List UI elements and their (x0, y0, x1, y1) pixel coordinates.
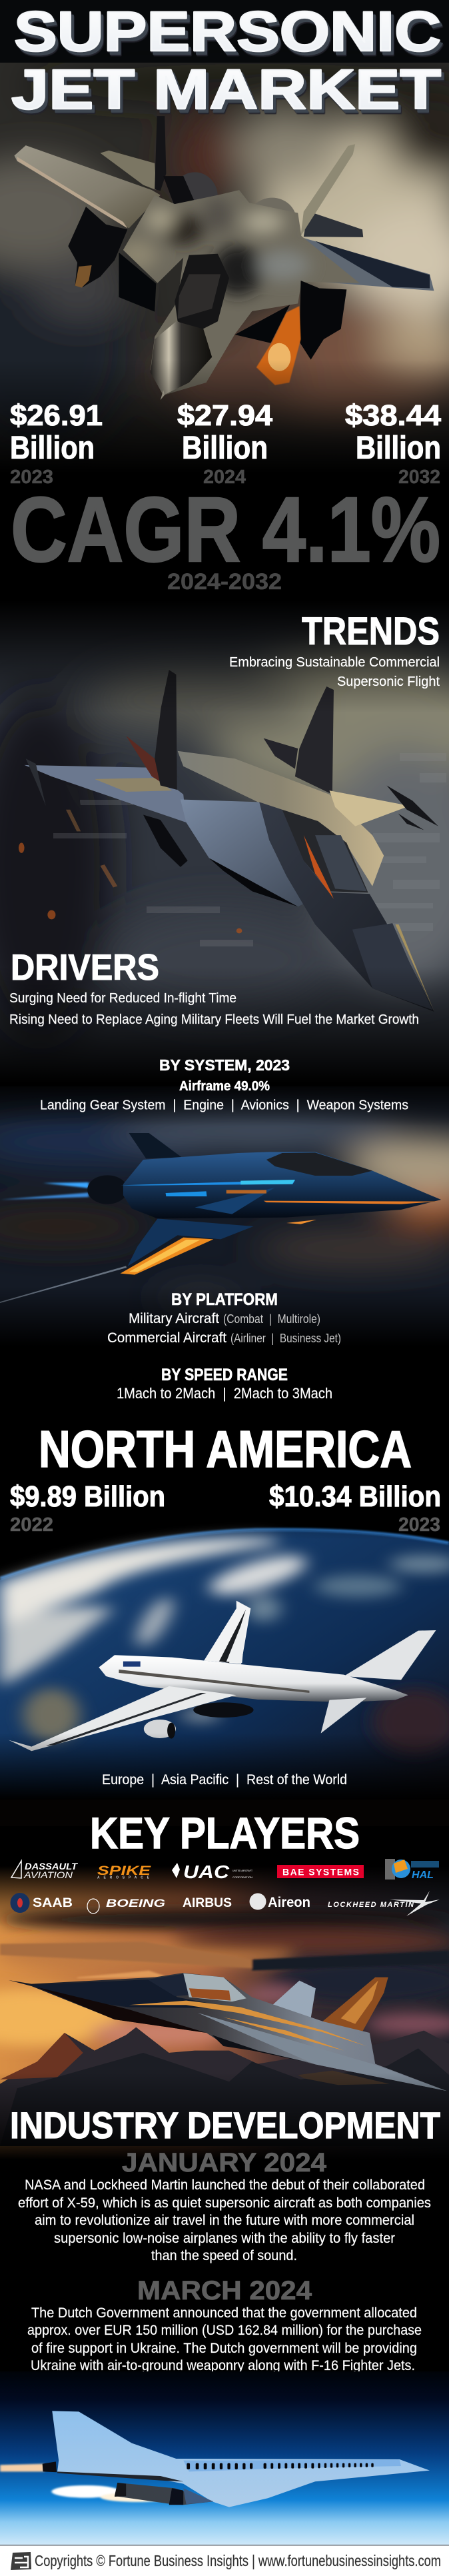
title: SUPERSONIC (14, 0, 441, 63)
commercial aircraft: (Airliner | Business Jet) (230, 1332, 341, 1345)
trends (229, 610, 440, 689)
fighter jet (25, 670, 438, 1012)
logo: Dassault Aviation: AVIATION (23, 1870, 73, 1880)
military aircraft: Military Aircraft (129, 1311, 219, 1326)
description (27, 2305, 422, 2373)
development: January 2024 (18, 2148, 431, 2263)
value 2032: $38.44 (345, 399, 442, 432)
image: jet over mountains at sunset (0, 1866, 449, 2173)
description: approx. over EUR 150 million (USD 162.84 million) for the purchase (27, 2323, 422, 2338)
trends text: Supersonic Flight (337, 674, 440, 689)
logo: Saab (11, 1893, 73, 1913)
logo: Aireon: Aireon (268, 1895, 310, 1910)
hero fade (0, 360, 449, 473)
image: jet over city (0, 615, 449, 1068)
title: JET MARKET (11, 58, 441, 121)
trends text: Embracing Sustainable Commercial (229, 655, 440, 670)
icon: Fortune Business Insights logo (11, 2552, 31, 2570)
value 2023: 2023 (10, 467, 53, 488)
description: supersonic low-noise airplanes with the ability to fly faster (54, 2231, 395, 2246)
fighter jet (15, 116, 434, 400)
logo: Dassault Aviation (11, 1861, 79, 1880)
drivers text: Surging Need for Reduced In-flight Time (9, 990, 236, 1006)
commercial aircraft: Commercial Aircraft (107, 1330, 226, 1346)
logo: UAC: UAC (183, 1862, 230, 1882)
market values (10, 399, 442, 488)
value 2022 (10, 1480, 165, 1536)
value 2022: $9.89 Billion (10, 1480, 165, 1513)
footer (0, 2545, 449, 2576)
commercial aircraft (107, 1330, 341, 1346)
description: The Dutch Government announced that the government allocated (31, 2305, 417, 2321)
description (18, 2177, 431, 2263)
CAGR period: 2024-2032 (167, 569, 282, 595)
drivers text: Rising Need to Replace Aging Military Fleets Will Fuel the Market Growth (9, 1012, 419, 1027)
segment: by platform (107, 1290, 341, 1346)
airframe share: Airframe 49.0% (179, 1079, 270, 1094)
description: aim to revolutionize air travel in the future with more commercial (35, 2213, 414, 2228)
fighter jet (270, 1981, 316, 2018)
logo: UAC: UNITED AIRCRAFT (232, 1869, 252, 1872)
image: blue jet above clouds (0, 1089, 449, 1333)
sparks (19, 810, 242, 933)
value 2032: 2032 (398, 467, 440, 488)
logo: Boeing: BOEING (106, 1897, 165, 1910)
city grid texture (53, 800, 433, 946)
segment: by speed range (117, 1366, 332, 1402)
value 2023 (10, 399, 103, 488)
value 2023 (269, 1480, 441, 1536)
logo: Spike Aerospace (97, 1864, 152, 1880)
by system heading: BY SYSTEM, 2023 (159, 1056, 290, 1074)
other regions: Europe | Asia Pacific | Rest of the World (102, 1772, 347, 1788)
value 2023: Billion (10, 431, 95, 466)
logo: Spike Aerospace: AEROSPACE (97, 1876, 150, 1880)
speed types: 1Mach to 2Mach | 2Mach to 3Mach (117, 1385, 332, 1402)
description: effort of X-59, which is as quiet supersonic aircraft as both companies (18, 2195, 431, 2211)
value 2023: $26.91 (10, 399, 103, 432)
north america (10, 1420, 441, 1788)
image: earth and airliner (0, 1526, 449, 1794)
hero image: fighter jet in clouds (0, 0, 449, 480)
logo: Aireon (249, 1893, 310, 1910)
cabin windows (187, 2463, 374, 2469)
system types: Landing Gear System | Engine | Avionics | Weapon Systems (40, 1097, 408, 1113)
logo: Saab: SAAB (33, 1896, 73, 1910)
development: March 2024 (27, 2276, 422, 2373)
by speed heading: BY SPEED RANGE (161, 1366, 288, 1384)
description: Ukraine with air-to-ground weaponry along with F-16 Fighter Jets. (31, 2358, 415, 2373)
logo: HAL: HAL (412, 1870, 434, 1881)
image: supersonic airliner in blue sky (0, 2371, 449, 2545)
value 2032 (345, 399, 442, 488)
logo: Lockheed Martin (328, 1891, 440, 1916)
military aircraft (129, 1311, 320, 1326)
date: MARCH 2024 (137, 2276, 312, 2305)
key players heading: KEY PLAYERS (90, 1808, 360, 1858)
value 2024: Billion (182, 431, 268, 466)
mountains (0, 2027, 449, 2146)
logo: Spike Aerospace: SPIKE (97, 1864, 152, 1878)
company logos (11, 1859, 440, 1916)
description: of fire support in Ukraine. The Dutch government will be providing (31, 2341, 417, 2356)
logo: UAC: CORPORATION (232, 1876, 252, 1879)
logo: Dassault Aviation: DASSAULT (25, 1861, 79, 1872)
logo: BAE Systems: BAE SYSTEMS (282, 1866, 359, 1877)
airliner (204, 1601, 250, 1664)
value 2024 (177, 399, 273, 488)
earth (0, 1530, 449, 1813)
logo: UAC (172, 1862, 252, 1882)
segment: by system (40, 1056, 408, 1113)
title (11, 0, 441, 121)
military aircraft: (Combat | Multirole) (223, 1312, 320, 1326)
drivers (9, 946, 419, 1027)
date: JANUARY 2024 (122, 2148, 327, 2177)
blue jet (0, 1133, 441, 1303)
value 2024: 2024 (203, 467, 246, 488)
logo: HAL (385, 1859, 439, 1881)
trends text (229, 655, 440, 689)
value 2023: 2023 (398, 1514, 440, 1536)
drivers text (9, 990, 419, 1027)
by platform heading: BY PLATFORM (171, 1290, 278, 1309)
value 2022: 2022 (10, 1514, 53, 1536)
value 2024: $27.94 (177, 399, 273, 432)
logo: Airbus: AIRBUS (183, 1896, 232, 1910)
drivers heading: DRIVERS (11, 946, 159, 988)
logo: Boeing (87, 1897, 165, 1914)
logo: Lockheed Martin: LOCKHEED MARTIN (328, 1901, 414, 1909)
description: NASA and Lockheed Martin launched the debut of their collaborated (25, 2177, 425, 2193)
description: than the speed of sound. (151, 2248, 297, 2263)
